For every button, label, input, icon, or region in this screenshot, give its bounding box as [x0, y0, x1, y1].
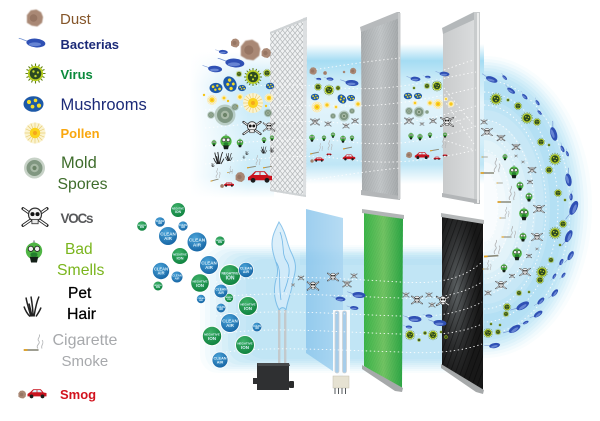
clean air and negative ion bubbles: ION	[218, 242, 222, 244]
clean air and negative ion bubbles: CLEAN	[179, 224, 187, 227]
pet hair	[211, 146, 274, 167]
legend panel	[18, 9, 147, 402]
legend: bad smells: Smells	[57, 262, 104, 279]
contaminants between filters 2 and 3	[404, 71, 454, 160]
clean air and negative ion bubbles: CLEAN	[213, 357, 227, 361]
clean air and negative ion bubbles: NEGATIVE	[216, 239, 224, 242]
clean air and negative ion bubbles: CLEAN	[215, 288, 227, 292]
clean air and negative ion bubbles: AIR	[218, 291, 224, 295]
clean air and negative ion bubbles: AIR	[255, 327, 259, 330]
legend: pet hair: Pet	[68, 285, 92, 302]
air stream: lower band	[200, 245, 484, 373]
filter 4: translucent blue panel	[306, 209, 343, 378]
contaminants in lower band	[291, 273, 449, 342]
legend: bad smells	[26, 240, 104, 279]
filter 2: grey pleated	[360, 12, 400, 200]
legend: bacterias: Bacterias	[60, 37, 119, 52]
legend: VOCs: VOCs	[60, 211, 94, 226]
return viruses	[483, 93, 567, 338]
legend: mushrooms: Mushrooms	[60, 96, 147, 114]
clean air and negative ion bubbles: ION	[244, 306, 252, 311]
bacteria	[202, 50, 245, 73]
legend: virus	[26, 64, 93, 84]
legend: mold spores	[24, 154, 108, 193]
viruses	[236, 68, 271, 86]
air stream: left of filter 1	[190, 52, 274, 198]
mushroom spores	[210, 74, 274, 94]
clean air and negative ion bubbles	[137, 202, 262, 368]
gas masks	[212, 134, 274, 149]
clean air and negative ion bubbles: NEGATIVE	[204, 333, 220, 337]
clean air and negative ion bubbles: AIR	[164, 236, 173, 241]
clean air and negative ion bubbles: NEGATIVE	[225, 296, 233, 299]
clean air and negative ion bubbles: NEGATIVE	[221, 272, 239, 276]
clean air and negative ion bubbles: NEGATIVE	[237, 342, 253, 346]
return cigarettes and smoke	[480, 157, 516, 270]
clean air and negative ion bubbles: CLEAN	[253, 325, 261, 328]
legend: pollen	[24, 122, 100, 144]
clean air and negative ion bubbles: AIR	[175, 276, 179, 280]
clean air and negative ion bubbles: AIR	[157, 271, 165, 276]
clean air and negative ion bubbles: AIR	[181, 226, 185, 229]
legend: cigarette smoke: Cigarette	[52, 332, 118, 349]
legend: bacterias	[19, 37, 119, 52]
clean air and negative ion bubbles: CLEAN	[189, 238, 206, 244]
legend: mold spores: Mold	[61, 154, 97, 172]
clean air and negative ion bubbles: AIR	[226, 323, 235, 328]
legend: smog: Smog	[60, 387, 96, 402]
clean air and negative ion bubbles: CLEAN	[154, 267, 168, 272]
clean air and negative ion bubbles: AIR	[193, 242, 202, 248]
legend: pet hair	[24, 285, 96, 323]
UV lamp	[333, 310, 350, 394]
legend: cigarette smoke	[24, 332, 118, 370]
clean air and negative ion bubbles: CLEAN	[160, 232, 176, 237]
cigarettes and smoke	[211, 155, 272, 182]
clean air and negative ion bubbles: CLEAN	[172, 274, 182, 278]
clean air and negative ion bubbles: CLEAN	[217, 306, 225, 309]
clean air and negative ion bubbles: CLEAN	[156, 220, 164, 223]
filter 3: light grey pleated	[442, 12, 480, 204]
legend: mushrooms	[24, 96, 147, 114]
smog cars	[220, 171, 272, 188]
clean air and negative ion bubbles: ION	[176, 256, 184, 261]
return gas masks	[501, 153, 533, 272]
contaminants before filter 1	[202, 38, 274, 188]
legend: mold spores: Spores	[58, 176, 108, 193]
filter 6: black carbon	[441, 213, 484, 394]
pollen	[203, 93, 274, 113]
clean air and negative ion bubbles: NEGATIVE	[173, 253, 187, 257]
clean air and negative ion bubbles: NEGATIVE	[172, 208, 184, 211]
legend: bad smells: Bad	[65, 241, 93, 258]
clean air and negative ion bubbles: AIR	[205, 265, 214, 270]
contaminants between filters 1 and 2	[309, 67, 361, 163]
clean air and negative ion bubbles: CLEAN	[222, 319, 238, 324]
clean air and negative ion bubbles: ION	[226, 276, 235, 282]
legend: pollen: Pollen	[60, 126, 100, 141]
clean air and negative ion bubbles: ION	[156, 287, 160, 289]
legend: cigarette smoke: Smoke	[62, 353, 108, 370]
clean air and negative ion bubbles: NEGATIVE	[138, 224, 147, 227]
clean air and negative ion bubbles: CLEAN	[240, 267, 253, 271]
clean air and negative ion bubbles: AIR	[243, 270, 249, 274]
legend: smog	[18, 387, 96, 402]
return bacteria	[480, 73, 580, 351]
clean air and negative ion bubbles: CLEAN	[201, 261, 217, 266]
clean air and negative ion bubbles: ION	[241, 345, 249, 350]
legend: dust	[27, 9, 92, 28]
clean air and negative ion bubbles: ION	[175, 210, 182, 214]
dust particles	[231, 38, 271, 60]
legend: pet hair: Hair	[67, 306, 96, 323]
clean air and negative ion bubbles: ION	[208, 336, 217, 341]
filter 1: white mesh	[270, 17, 307, 197]
clean air and negative ion bubbles: NEGATIVE	[154, 284, 162, 287]
contaminants in semicircular return flow	[480, 73, 580, 351]
air stream: top band	[272, 44, 484, 184]
clean air and negative ion bubbles: AIR	[158, 222, 162, 225]
airflow dashed lines	[205, 58, 570, 353]
air stream: semicircular return	[484, 56, 592, 358]
return skulls	[481, 120, 544, 295]
legend: virus: Virus	[60, 67, 93, 82]
clean air and negative ion bubbles: ION	[140, 226, 144, 229]
clean air and negative ion bubbles: CLEAN	[197, 297, 205, 300]
filter 5: green pleated	[362, 209, 404, 392]
clean air and negative ion bubbles: AIR	[219, 308, 223, 311]
legend: VOCs	[23, 208, 94, 226]
clean air and negative ion bubbles: NEGATIVE	[192, 280, 208, 284]
clean air and negative ion bubbles: AIR	[199, 299, 203, 302]
VOC skulls	[244, 122, 274, 134]
clean air and negative ion bubbles: NEGATIVE	[240, 303, 256, 307]
clean air and negative ion bubbles: ION	[227, 299, 231, 301]
legend: dust: Dust	[60, 11, 92, 28]
mold spores	[207, 103, 272, 126]
clean air and negative ion bubbles: AIR	[217, 360, 224, 364]
clean air and negative ion bubbles: ION	[196, 283, 204, 288]
ionizer box with tubes and flame	[253, 222, 295, 390]
